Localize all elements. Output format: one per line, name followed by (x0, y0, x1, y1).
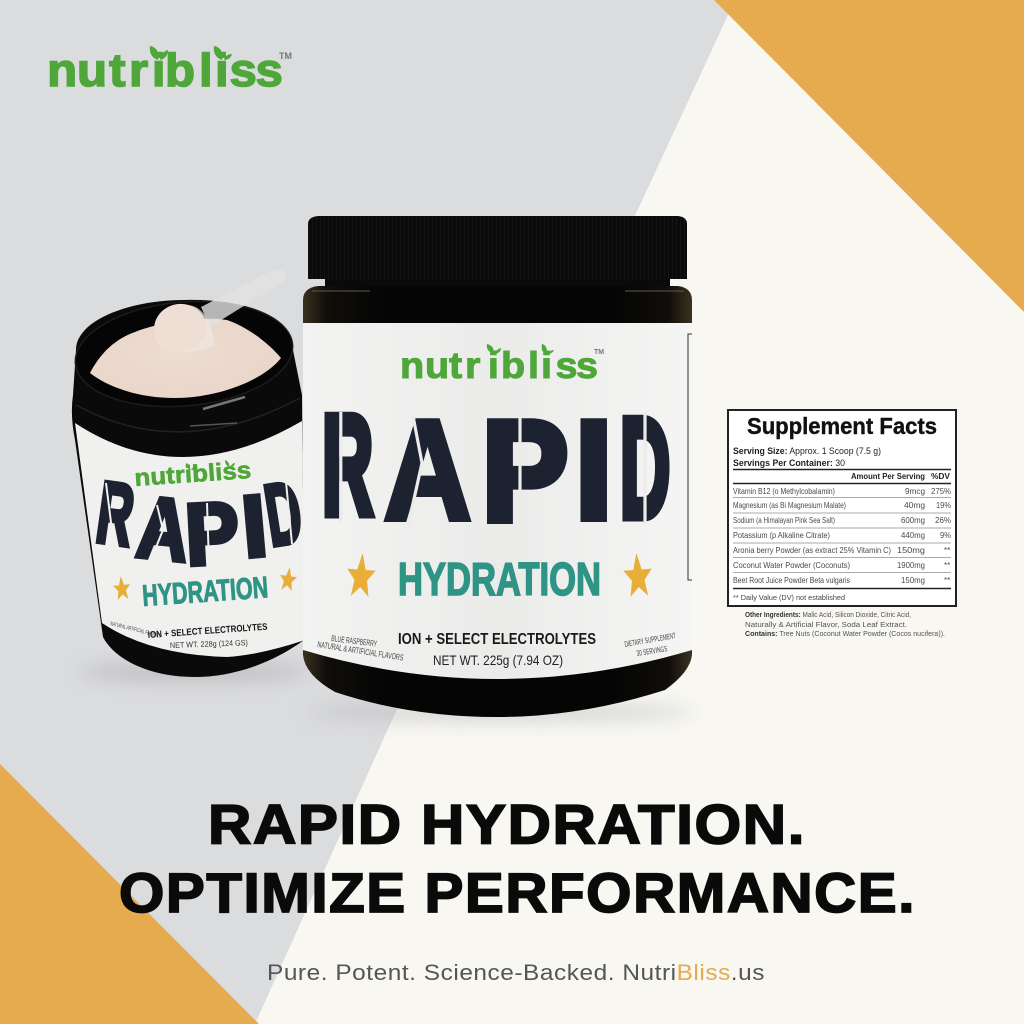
HYDRATION: HYDRATION (398, 553, 601, 605)
nutrient rows: 19% (936, 501, 951, 510)
serving info: Serving Size: Approx. 1 Scoop (7.5 g) (733, 446, 881, 456)
small jar RAPID: D (259, 462, 308, 564)
serving info: Servings Per Container: 30 (733, 458, 845, 468)
panel footnote: ** Daily Value (DV) not established (733, 593, 845, 602)
large RAPID: R (322, 385, 373, 544)
nutrient rows: 1900mg (897, 561, 925, 570)
other ingredients text: Other Ingredients: Malic Acid, Silicon Dioxide, Citric Acid, (745, 610, 911, 619)
brand logo: TM (279, 51, 292, 61)
table header: Amount Per Serving (851, 472, 925, 481)
side panel of label (688, 334, 692, 580)
other ingredients text: Naturally & Artificial Flavor, Soda Leaf Extract. (745, 620, 907, 629)
large jar logo: nutribliss (400, 345, 598, 387)
supplement text right (624, 631, 677, 658)
white label (75, 421, 305, 657)
row rules (733, 498, 951, 572)
nutrient rows (733, 487, 951, 585)
flavor text left: BLUE RASPBERRY (331, 633, 378, 649)
flavor text left (317, 633, 404, 663)
large RAPID: P (482, 391, 568, 550)
small jar stencil cuts (106, 482, 292, 564)
large RAPID: D (620, 389, 670, 547)
serving info (733, 446, 881, 468)
lid (308, 216, 687, 279)
tagline: Pure. Potent. Science-Backed. Nutri Bliss.us (267, 960, 765, 985)
other ingredients text: Contains: Tree Nuts (Coconut Water Powder (Cocos nucifera)). (745, 629, 945, 638)
nutrient rows: 600mg (901, 516, 925, 525)
flavor text left: NATURAL & ARTIFICIAL FLAVORS (317, 639, 404, 663)
small jar HYDRATION: HYDRATION (141, 571, 269, 613)
small jar RAPID (91, 462, 308, 584)
headline: RAPID HYDRATION. (208, 792, 806, 856)
table rules (733, 470, 951, 588)
supplement facts panel (728, 410, 956, 606)
background: orange bottom-left triangle (0, 764, 259, 1024)
body shine (312, 290, 684, 292)
large RAPID (322, 385, 670, 550)
jar shadow (80, 662, 310, 682)
headline (119, 792, 916, 924)
nutrient rows: Sodium (a Himalayan Pink Sea Salt) (733, 516, 835, 525)
small jar net weight: NET WT. 228g (124 GS) (170, 638, 248, 650)
large RAPID: A (384, 391, 471, 549)
large RAPID: I (574, 391, 613, 550)
other ingredients text (745, 610, 945, 638)
small jar RAPID: I (238, 477, 271, 576)
powder (90, 319, 281, 398)
lower collar highlight (190, 423, 237, 426)
nutrient rows: Vitamin B12 (o Methylcobalamin) (733, 487, 835, 496)
white label (303, 323, 692, 679)
nutrient rows: ** (944, 576, 950, 585)
background: orange top-right triangle (714, 0, 1024, 312)
electrolytes line: ION + SELECT ELECTROLYTES (398, 631, 596, 648)
nutrient rows: ** (944, 561, 950, 570)
small jar stars (112, 575, 132, 600)
nutrient rows: 150mg (897, 546, 925, 555)
large jar (303, 216, 695, 721)
background: grey diagonal panel (0, 0, 735, 1024)
nutrient rows: Potassium (p Alkaline Citrate) (733, 531, 830, 540)
small jar RAPID: P (183, 483, 241, 584)
nutrient rows: 150mg (901, 576, 925, 585)
headline: OPTIMIZE PERFORMANCE. (119, 861, 916, 924)
nutrient rows: 26% (935, 516, 951, 525)
brand logo: nutribliss (47, 45, 283, 97)
small open jar (71, 270, 310, 682)
nutrient rows: Beet Root Juice Powder Beta vulgaris (733, 576, 850, 585)
supplement text right: 30 SERVINGS (636, 644, 668, 658)
net weight: NET WT. 225g (7.94 OZ) (433, 652, 563, 668)
scoop with handle (150, 270, 286, 357)
panel box (728, 410, 956, 606)
jar body (72, 300, 304, 677)
small jar RAPID: R (91, 463, 140, 564)
supplement text right: DIETARY SUPPLEMENT (624, 631, 677, 649)
panel title: Supplement Facts (747, 413, 937, 439)
jar body (303, 286, 692, 717)
small jar side text left: NATURAL ARTIFICIAL FLAVORS (110, 621, 162, 640)
neck (325, 278, 670, 290)
large jar shadow (305, 703, 695, 721)
large jar logo: TM (594, 349, 604, 356)
nutrient rows: Magnesium (as Bi Magnesium Malate) (733, 501, 846, 510)
stars (345, 552, 377, 597)
small jar RAPID: A (133, 477, 194, 580)
nutrient rows: Aronia berry Powder (as extract 25% Vitamin C) (733, 546, 891, 555)
nutrient rows: 9mcg (905, 487, 925, 496)
nutrient rows: 275% (931, 487, 951, 496)
collar grooves (76, 398, 300, 432)
rim (71, 293, 297, 415)
nutrient rows: Coconut Water Powder (Coconuts) (733, 561, 850, 570)
nutrient rows: ** (944, 546, 950, 555)
nutrient rows: 40mg (904, 501, 925, 510)
nutrient rows: 440mg (901, 531, 925, 540)
table header: %DV (931, 472, 951, 481)
nutrient rows: 9% (940, 531, 951, 540)
large RAPID stencil cuts (341, 412, 645, 526)
small jar logo: nutribliss (134, 457, 252, 492)
small jar electrolytes line: ION + SELECT ELECTROLYTES (147, 622, 268, 641)
collar highlights (203, 397, 245, 409)
